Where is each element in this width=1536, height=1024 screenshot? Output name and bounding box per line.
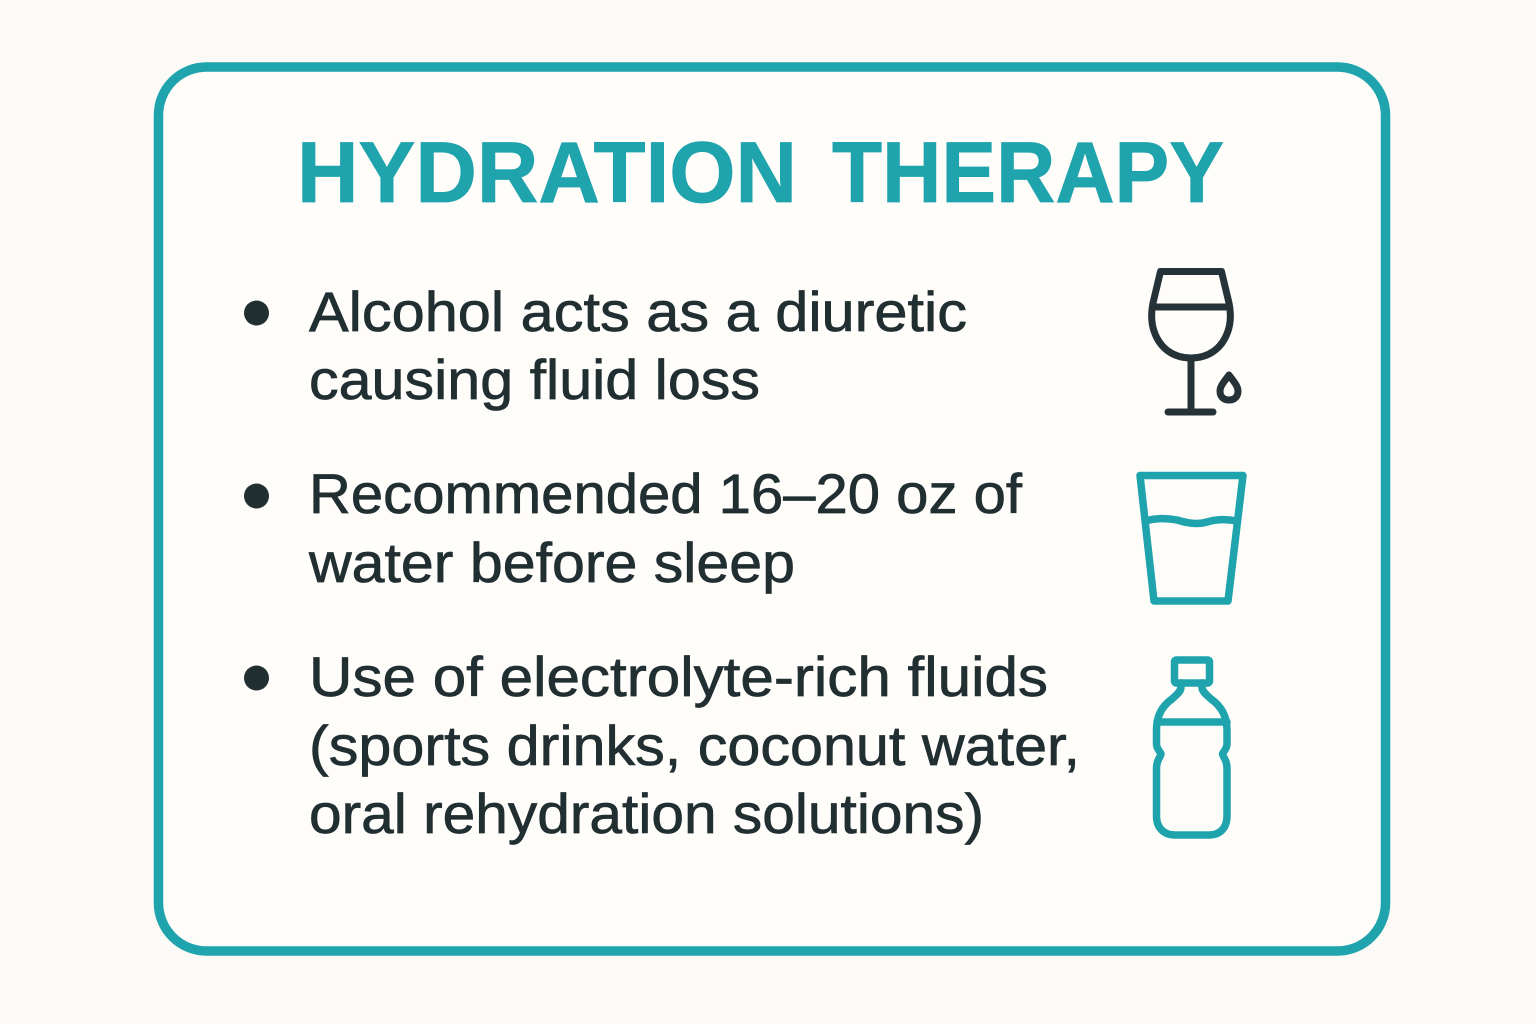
panel: hydration therapy card (158, 67, 1386, 951)
title: THERAPY (832, 125, 1224, 221)
bullet 1: causing fluid loss (309, 348, 760, 411)
icon: plastic bottle (1156, 660, 1227, 835)
title: HYDRATION (297, 125, 797, 221)
bullet 2: Recommended 16–20 oz of (309, 462, 1022, 525)
bullet 1 (244, 280, 967, 411)
bullet 1: Alcohol acts as a diuretic (309, 280, 967, 343)
bullet 3 (244, 645, 1080, 845)
bullet 3: oral rehydration solutions) (309, 782, 984, 845)
icon: water glass (1140, 476, 1243, 601)
bullet 3: (sports drinks, coconut water, (309, 714, 1080, 777)
bullet 2 (244, 462, 1022, 594)
bullet 3: Use of electrolyte-rich fluids (309, 645, 1048, 708)
bullet 2: water before sleep (308, 531, 795, 594)
icon: wine glass with drop (1152, 272, 1238, 412)
title (297, 125, 1224, 221)
